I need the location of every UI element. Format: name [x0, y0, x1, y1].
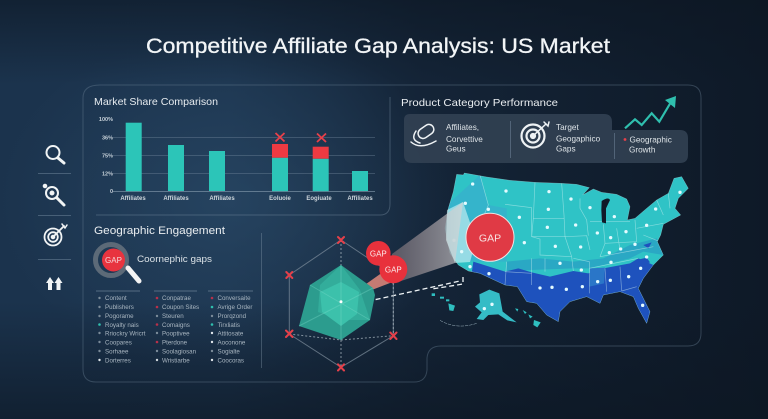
- bar chart: Eoluoie: [269, 196, 291, 202]
- icon: target: [522, 122, 549, 148]
- table column one: [98, 295, 146, 364]
- gap badges: GAP: [370, 249, 387, 258]
- table column three: Aoconone: [218, 340, 246, 346]
- table column three: Sogialte: [218, 348, 240, 356]
- gap beam: [341, 202, 476, 302]
- icon: search with dots: [44, 185, 64, 205]
- outer panel frame: [83, 85, 701, 382]
- text: geographic growth: Growth: [629, 146, 656, 154]
- bar chart: 100%: [99, 117, 113, 123]
- text: geographic growth: Geographic: [630, 136, 672, 144]
- table column three: Avrige Order: [218, 304, 252, 311]
- table column one: Pogorame: [105, 313, 134, 320]
- sidebar icons: [44, 146, 67, 290]
- table column one: Publishers: [105, 304, 134, 311]
- icon: link handshake: [411, 122, 436, 146]
- gap badges: GAP: [385, 265, 402, 274]
- table column one: Coopares: [105, 340, 132, 346]
- state dots: [452, 182, 682, 310]
- heading: market share: Market Share Comparison: [94, 96, 218, 108]
- table column three: Coocoras: [218, 358, 244, 364]
- text: affiliates: [446, 123, 483, 154]
- category card: [404, 114, 688, 163]
- text: affiliates: Affiliates,: [446, 123, 479, 132]
- table column one: Dorterres: [105, 358, 131, 364]
- table column three: Conversaite: [218, 295, 251, 302]
- text: target: [556, 123, 601, 154]
- table column three: Attitosate: [218, 330, 244, 338]
- dashed connector: [360, 277, 463, 303]
- bar chart: Affiliates: [163, 196, 189, 202]
- bar chart: 36%: [102, 136, 113, 142]
- table column two: [156, 295, 199, 364]
- icon: target: [44, 224, 67, 246]
- table column two: Pooptivee: [162, 330, 190, 338]
- icon: gap magnifier: GAP: [105, 256, 122, 265]
- table column three: Prorqzond: [218, 313, 247, 320]
- text: target: Target: [556, 123, 579, 132]
- panel: product category performance: [401, 96, 688, 163]
- bar chart: 12%: [102, 172, 113, 178]
- panel: geographic engagement: [94, 225, 262, 368]
- subheading: gaps: Coornephic gaps: [137, 254, 212, 265]
- text: geographic growth: [624, 136, 672, 154]
- heading: product category: Product Category Performance: [401, 97, 558, 109]
- table column two: Wristiarbe: [162, 358, 190, 364]
- alaska: [475, 290, 517, 322]
- icon: up arrows: [46, 277, 62, 290]
- table column two: Pterdone: [162, 340, 188, 346]
- text: affiliates: Geus: [446, 144, 466, 154]
- lake michigan: [601, 199, 610, 223]
- text: target: Gaps: [556, 144, 576, 154]
- text: affiliates: Corvettive: [446, 135, 483, 144]
- table column two: Coupon Sites: [162, 304, 199, 311]
- icon: search: [46, 146, 64, 163]
- table column two: Steuren: [162, 313, 184, 320]
- panel: market share comparison: [94, 96, 390, 215]
- title: Competitive Affiliate Gap Analysis: US Market: [146, 35, 610, 58]
- table column one: Sorhaee: [105, 348, 129, 356]
- bar chart: Eogiuate: [306, 196, 332, 202]
- map gap badge: GAP: [479, 232, 501, 244]
- icon: gap magnifier: [96, 244, 139, 281]
- heading: geographic engagement: Geographic Engagement: [94, 225, 225, 237]
- map gap badge: [466, 213, 514, 261]
- bar chart: Affiliates: [120, 196, 146, 202]
- sidebar dividers: [38, 174, 71, 260]
- table column one: Content: [105, 295, 127, 302]
- table column two: Comaigns: [162, 322, 190, 329]
- US map: [432, 172, 689, 328]
- table column three: Tirxliatis: [218, 322, 240, 329]
- bar chart: 75%: [102, 154, 113, 160]
- table column two: Conpatrae: [162, 295, 191, 302]
- table column three: [211, 295, 252, 364]
- text: target: Geogaphico: [556, 134, 601, 144]
- table column two: Soolagiosan: [162, 348, 197, 356]
- bar chart: Affiliates: [209, 196, 235, 202]
- gap badges: [366, 241, 407, 283]
- bar chart: [99, 117, 375, 202]
- bar chart: Affiliates: [347, 196, 373, 202]
- bar chart: 0: [110, 189, 113, 195]
- table column one: Rriockry Wricrt: [105, 330, 146, 338]
- icon: trend arrow: [625, 96, 676, 128]
- hawaii islands: [432, 293, 541, 327]
- radar chart: [286, 237, 396, 370]
- table column one: Royalty nais: [105, 322, 139, 329]
